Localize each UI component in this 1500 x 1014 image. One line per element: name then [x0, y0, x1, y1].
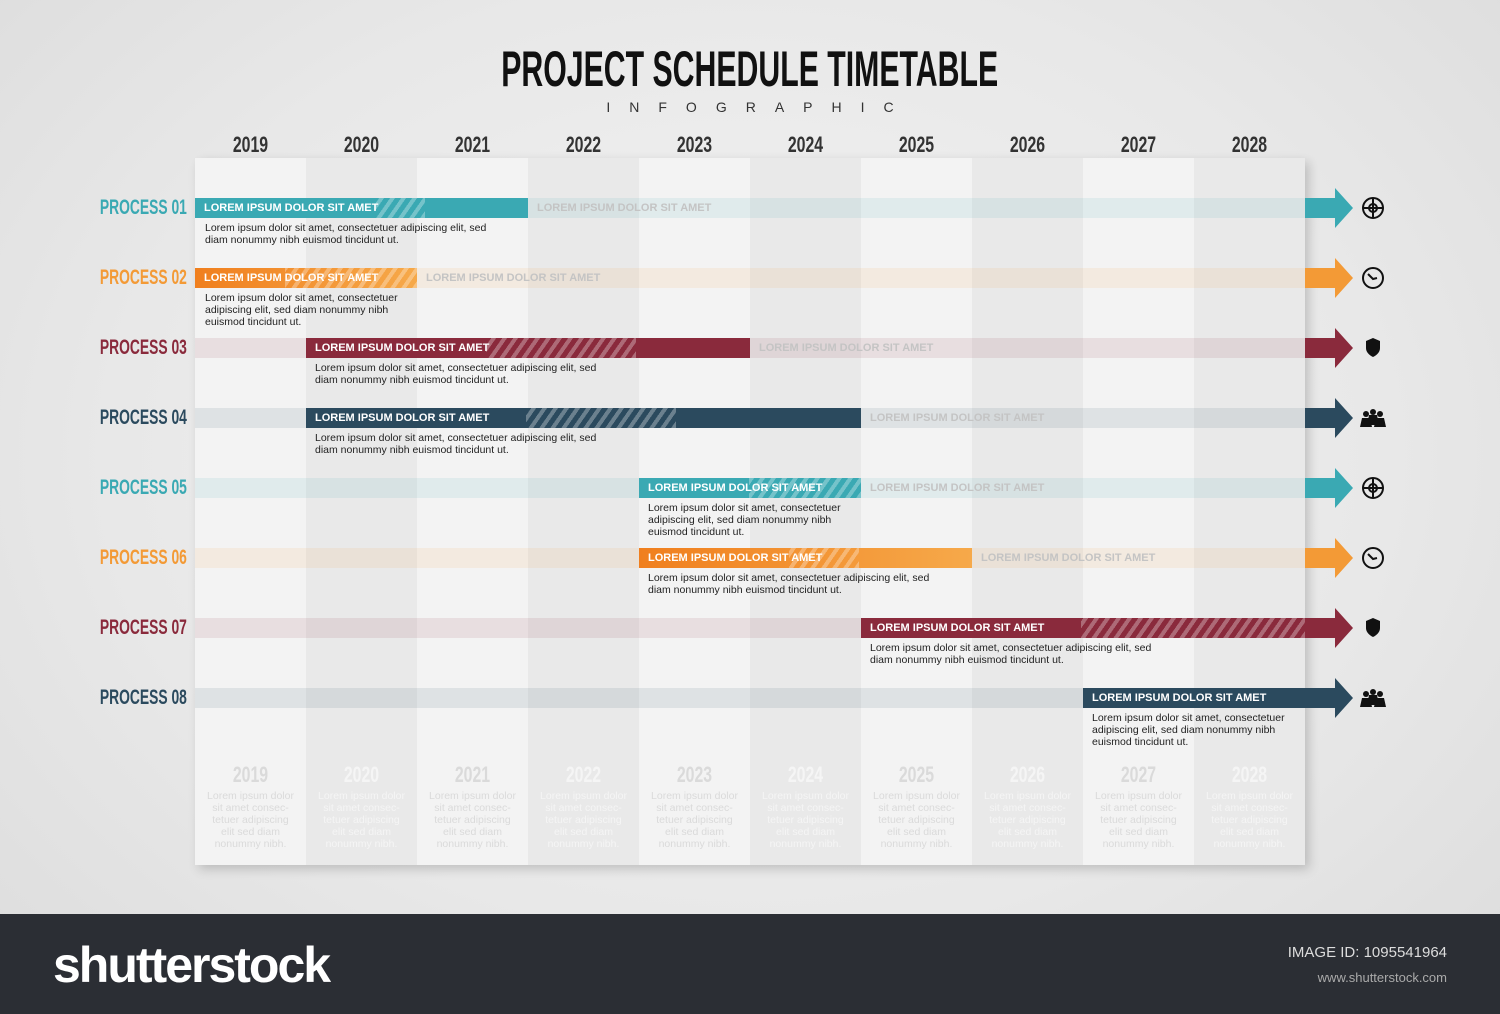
- text: Lorem ipsum dolor: [540, 790, 627, 802]
- text: Lorem ipsum dolor sit amet, consectetuer: [648, 502, 841, 514]
- text: nonummy nibh.: [992, 838, 1063, 850]
- footer logo: shutterstock: [53, 937, 329, 993]
- text: tetuer adipiscing: [545, 814, 622, 826]
- text: 2019: [233, 132, 268, 157]
- text: Lorem ipsum dolor: [984, 790, 1071, 802]
- text: LOREM IPSUM DOLOR SIT AMET: [870, 482, 1044, 494]
- row 4: [306, 408, 1044, 456]
- text: sit amet consec-: [323, 802, 400, 814]
- text: tetuer adipiscing: [989, 814, 1066, 826]
- row 5: [639, 478, 1044, 538]
- text: 2022: [566, 132, 601, 157]
- text: LOREM IPSUM DOLOR SIT AMET: [1092, 692, 1266, 704]
- text: Lorem ipsum dolor sit amet, consectetuer: [205, 292, 398, 304]
- text: Lorem ipsum dolor: [429, 790, 516, 802]
- text: sit amet consec-: [767, 802, 844, 814]
- text: Lorem ipsum dolor: [873, 790, 960, 802]
- text: elit sed diam: [443, 826, 502, 838]
- row 7: [861, 618, 1305, 666]
- text: PROCESS 07: [100, 616, 187, 639]
- text: diam nonummy nibh euismod tincidunt ut.: [205, 234, 399, 246]
- footer url: www.shutterstock.com: [1318, 970, 1447, 985]
- text: elit sed diam: [887, 826, 946, 838]
- text: PROCESS 05: [100, 476, 187, 499]
- text: nonummy nibh.: [659, 838, 730, 850]
- text: diam nonummy nibh euismod tincidunt ut.: [315, 374, 509, 386]
- footer bar: [0, 914, 1500, 1014]
- text: sit amet consec-: [1100, 802, 1177, 814]
- process labels: [100, 196, 187, 709]
- row 8: [1083, 688, 1305, 748]
- text: sit amet consec-: [545, 802, 622, 814]
- text: nonummy nibh.: [1214, 838, 1285, 850]
- title: PROJECT SCHEDULE TIMETABLE: [502, 41, 998, 97]
- text: euismod tincidunt ut.: [648, 526, 744, 538]
- text: 2020: [344, 762, 379, 787]
- text: elit sed diam: [1220, 826, 1279, 838]
- text: 2020: [344, 132, 379, 157]
- text: tetuer adipiscing: [212, 814, 289, 826]
- text: 2023: [677, 132, 712, 157]
- text: Lorem ipsum dolor: [207, 790, 294, 802]
- text: nonummy nibh.: [548, 838, 619, 850]
- text: PROCESS 08: [100, 686, 187, 709]
- text: Lorem ipsum dolor: [1206, 790, 1293, 802]
- year headers: [233, 132, 1267, 157]
- text: Lorem ipsum dolor: [762, 790, 849, 802]
- text: PROCESS 03: [100, 336, 187, 359]
- text: sit amet consec-: [989, 802, 1066, 814]
- text: LOREM IPSUM DOLOR SIT AMET: [204, 272, 378, 284]
- footer image id: IMAGE ID: 1095541964: [1288, 944, 1447, 961]
- text: 2023: [677, 762, 712, 787]
- text: PROCESS 04: [100, 406, 187, 429]
- text: Lorem ipsum dolor: [318, 790, 405, 802]
- text: LOREM IPSUM DOLOR SIT AMET: [537, 202, 711, 214]
- text: 2025: [899, 132, 934, 157]
- text: nonummy nibh.: [326, 838, 397, 850]
- text: Lorem ipsum dolor sit amet, consectetuer adipiscing elit, sed: [870, 642, 1151, 654]
- text: elit sed diam: [332, 826, 391, 838]
- bottom year notes: [207, 762, 1293, 850]
- text: nonummy nibh.: [215, 838, 286, 850]
- text: adipiscing elit, sed diam nonummy nibh: [648, 514, 831, 526]
- text: LOREM IPSUM DOLOR SIT AMET: [981, 552, 1155, 564]
- text: 2024: [788, 762, 823, 787]
- text: Lorem ipsum dolor: [651, 790, 738, 802]
- text: Lorem ipsum dolor: [1095, 790, 1182, 802]
- text: Lorem ipsum dolor sit amet, consectetuer adipiscing elit, sed: [315, 432, 596, 444]
- text: tetuer adipiscing: [1211, 814, 1288, 826]
- text: 2028: [1232, 762, 1267, 787]
- text: Lorem ipsum dolor sit amet, consectetuer adipiscing elit, sed: [205, 222, 486, 234]
- row 6: [639, 548, 1156, 596]
- text: LOREM IPSUM DOLOR SIT AMET: [870, 622, 1044, 634]
- text: elit sed diam: [998, 826, 1057, 838]
- text: nonummy nibh.: [1103, 838, 1174, 850]
- text: LOREM IPSUM DOLOR SIT AMET: [315, 342, 489, 354]
- row 3: [306, 338, 934, 386]
- text: LOREM IPSUM DOLOR SIT AMET: [315, 412, 489, 424]
- text: 2019: [233, 762, 268, 787]
- text: 2022: [566, 762, 601, 787]
- text: LOREM IPSUM DOLOR SIT AMET: [648, 482, 822, 494]
- text: sit amet consec-: [1211, 802, 1288, 814]
- text: 2027: [1121, 132, 1156, 157]
- subtitle: INFOGRAPHIC: [606, 99, 913, 115]
- text: sit amet consec-: [434, 802, 511, 814]
- text: elit sed diam: [665, 826, 724, 838]
- text: 2027: [1121, 762, 1156, 787]
- text: diam nonummy nibh euismod tincidunt ut.: [648, 584, 842, 596]
- text: tetuer adipiscing: [878, 814, 955, 826]
- text: sit amet consec-: [212, 802, 289, 814]
- text: tetuer adipiscing: [323, 814, 400, 826]
- timeline grid panel: [195, 158, 1305, 865]
- text: euismod tincidunt ut.: [205, 316, 301, 328]
- text: adipiscing elit, sed diam nonummy nibh: [205, 304, 388, 316]
- end arrows and icons: [1305, 188, 1386, 718]
- text: tetuer adipiscing: [434, 814, 511, 826]
- text: 2025: [899, 762, 934, 787]
- text: nonummy nibh.: [881, 838, 952, 850]
- row 2: [195, 268, 600, 328]
- text: 2024: [788, 132, 823, 157]
- text: euismod tincidunt ut.: [1092, 736, 1188, 748]
- text: sit amet consec-: [656, 802, 733, 814]
- text: LOREM IPSUM DOLOR SIT AMET: [426, 272, 600, 284]
- text: elit sed diam: [776, 826, 835, 838]
- text: elit sed diam: [554, 826, 613, 838]
- text: PROCESS 01: [100, 196, 187, 219]
- text: elit sed diam: [221, 826, 280, 838]
- text: LOREM IPSUM DOLOR SIT AMET: [870, 412, 1044, 424]
- background tracks: [195, 198, 1379, 708]
- text: nonummy nibh.: [437, 838, 508, 850]
- text: Lorem ipsum dolor sit amet, consectetuer adipiscing elit, sed: [648, 572, 929, 584]
- text: Lorem ipsum dolor sit amet, consectetuer adipiscing elit, sed: [315, 362, 596, 374]
- text: 2026: [1010, 132, 1045, 157]
- text: PROCESS 02: [100, 266, 187, 289]
- text: elit sed diam: [1109, 826, 1168, 838]
- text: nonummy nibh.: [770, 838, 841, 850]
- text: LOREM IPSUM DOLOR SIT AMET: [759, 342, 933, 354]
- text: tetuer adipiscing: [767, 814, 844, 826]
- text: LOREM IPSUM DOLOR SIT AMET: [648, 552, 822, 564]
- text: 2021: [455, 132, 490, 157]
- text: PROCESS 06: [100, 546, 187, 569]
- text: 2028: [1232, 132, 1267, 157]
- text: Lorem ipsum dolor sit amet, consectetuer: [1092, 712, 1285, 724]
- text: diam nonummy nibh euismod tincidunt ut.: [870, 654, 1064, 666]
- text: sit amet consec-: [878, 802, 955, 814]
- text: 2026: [1010, 762, 1045, 787]
- text: 2021: [455, 762, 490, 787]
- text: tetuer adipiscing: [656, 814, 733, 826]
- text: diam nonummy nibh euismod tincidunt ut.: [315, 444, 509, 456]
- text: tetuer adipiscing: [1100, 814, 1177, 826]
- row 1: [195, 198, 712, 246]
- text: LOREM IPSUM DOLOR SIT AMET: [204, 202, 378, 214]
- text: adipiscing elit, sed diam nonummy nibh: [1092, 724, 1275, 736]
